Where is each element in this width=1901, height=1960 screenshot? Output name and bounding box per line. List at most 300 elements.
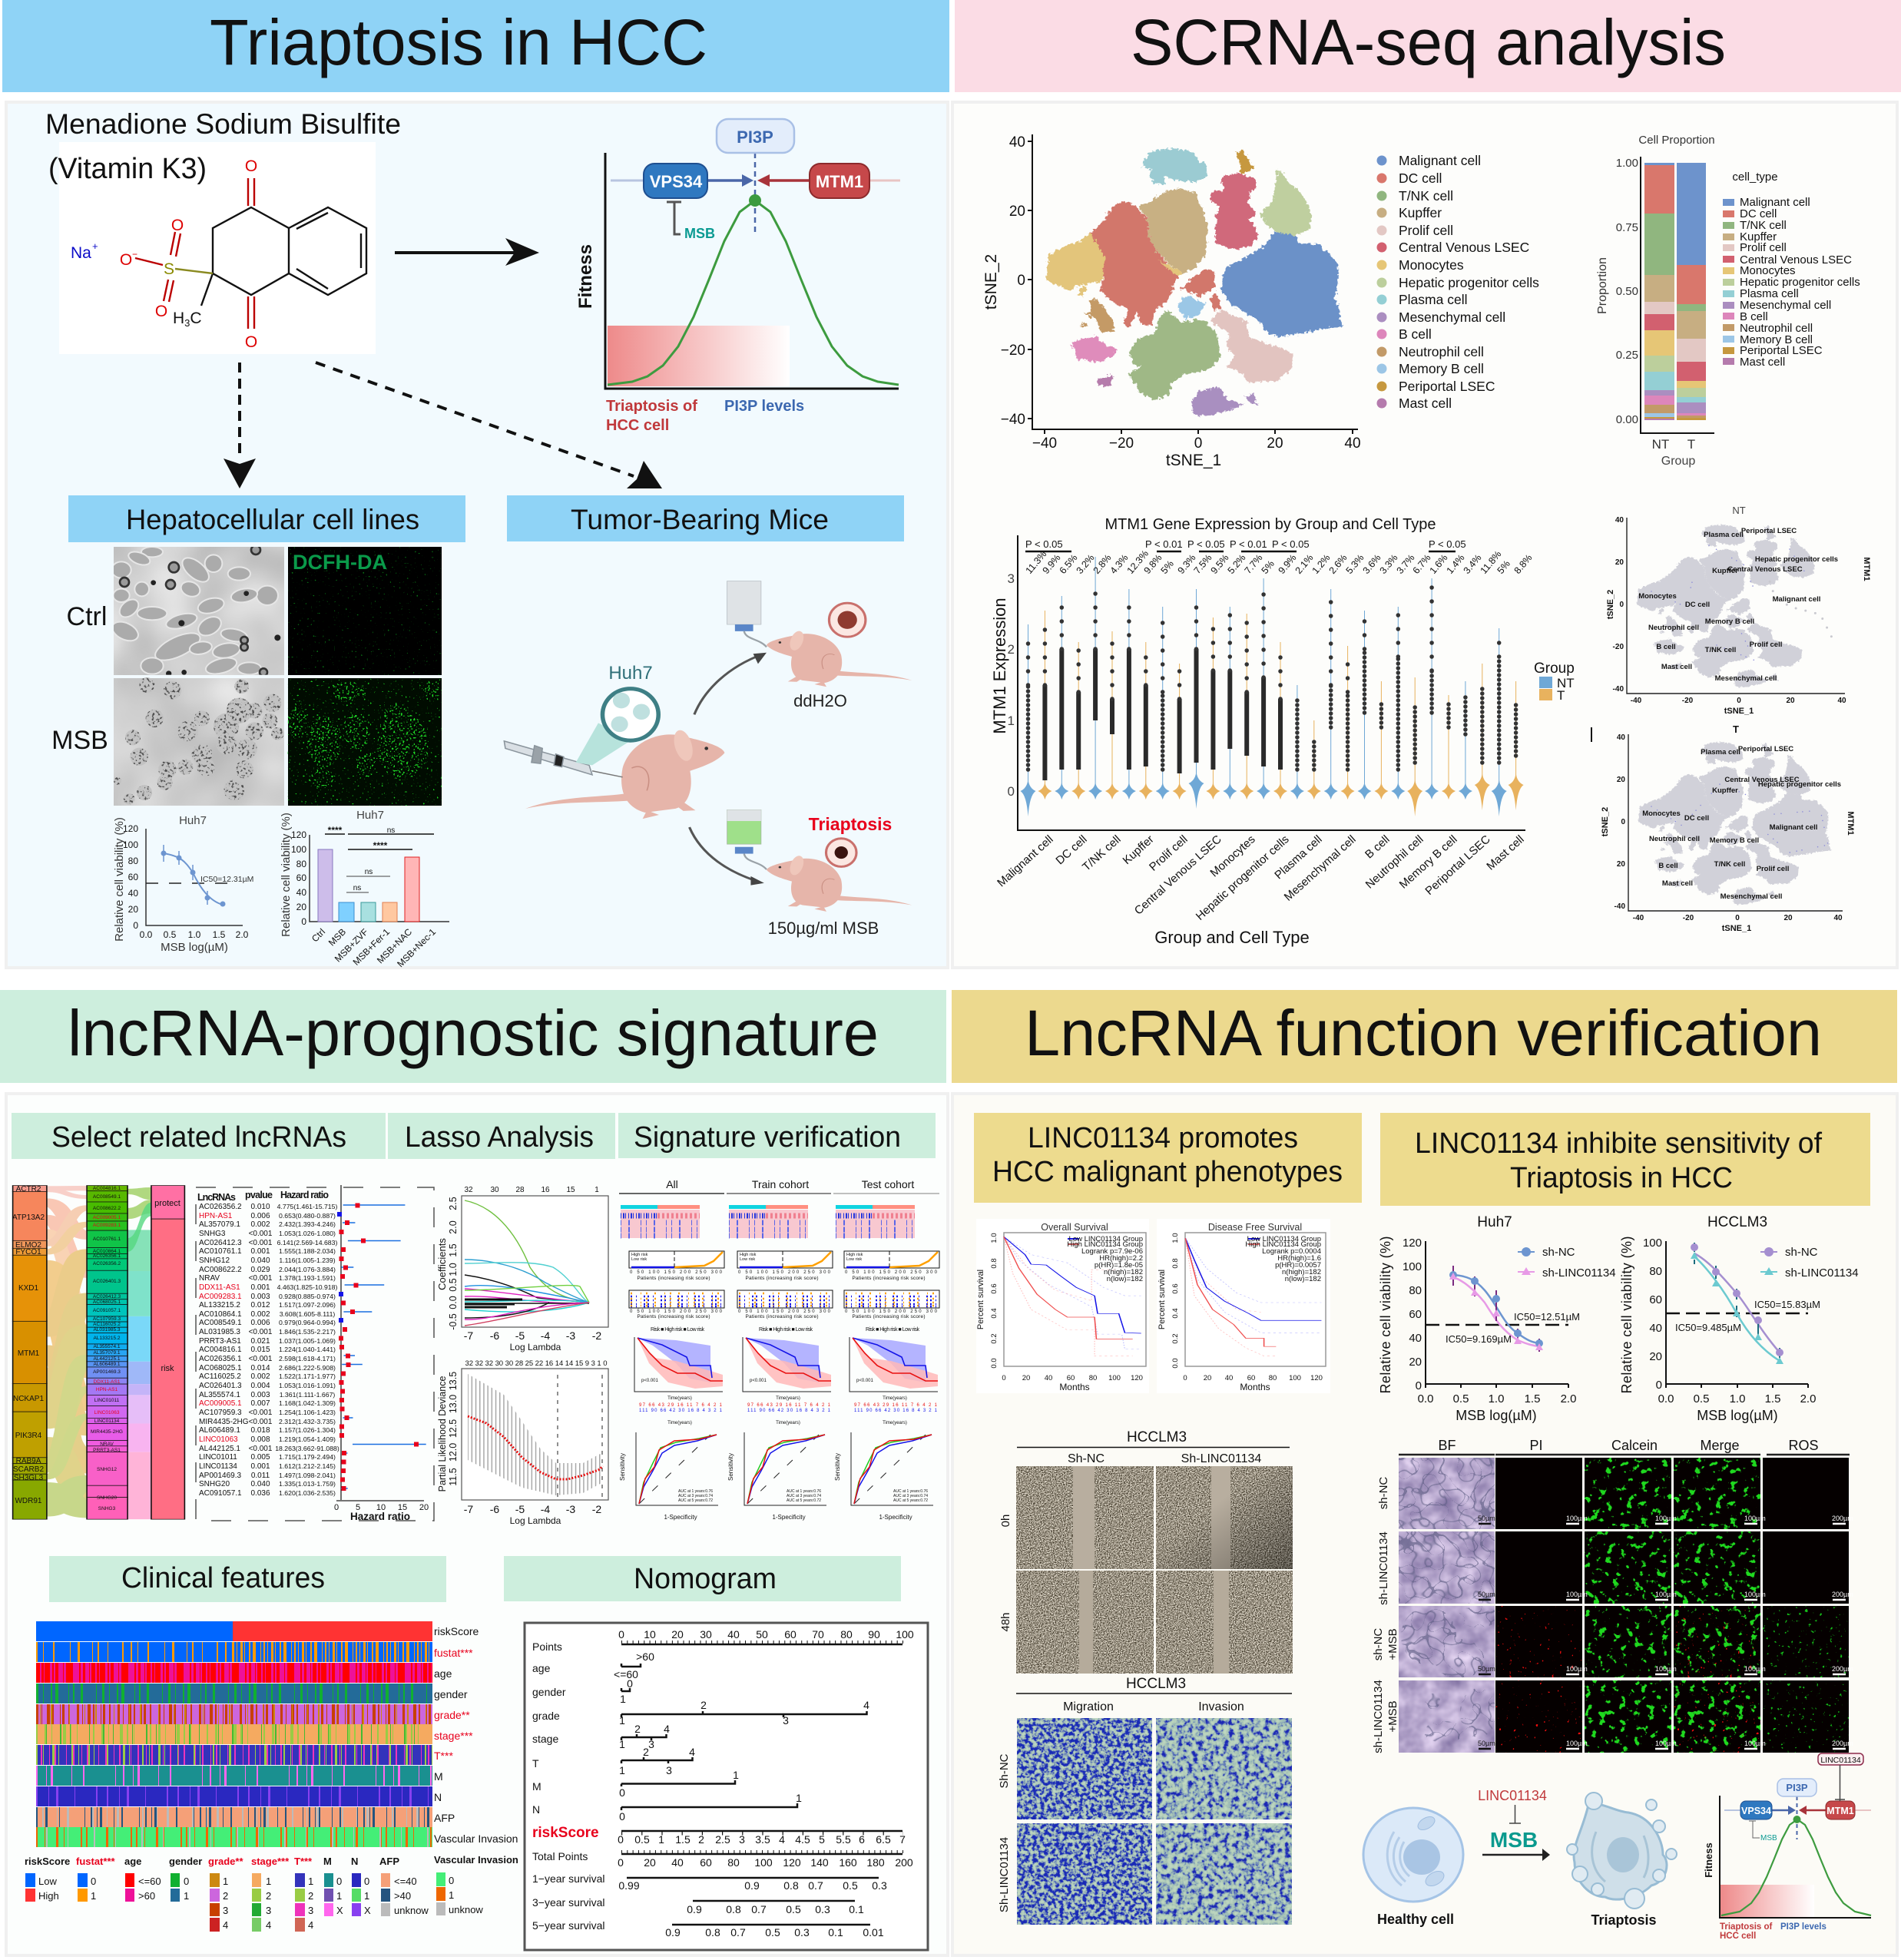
microscopy: wound healing: HCCLM3 [1127, 1429, 1187, 1445]
table rows: AL355574.1 [199, 1391, 240, 1399]
table rows: AP001469.3 [199, 1472, 241, 1480]
chart: disease free survival: 1.0 [1171, 1233, 1180, 1243]
chart: viability bars: MSB+Nec-1 [395, 926, 438, 969]
lncRNA labels: AC009005.1 [93, 1215, 121, 1220]
lncRNA labels: LINC01134 [94, 1419, 120, 1424]
chart: Huh7 dose response: 80 [1409, 1284, 1422, 1297]
lncRNA labels: AC091057.1 [93, 1308, 121, 1313]
chart: Huh7 dose response: Huh7 [1477, 1214, 1512, 1230]
axis captions: Triaptosis of [606, 398, 697, 415]
heading: LINC01134 promotes: HCC malignant phenotypes [992, 1156, 1343, 1188]
percentage labels: 7.7% [1243, 552, 1265, 576]
lncRNA labels: AC068025.1 [93, 1299, 121, 1305]
legend: clinical: 2 [266, 1890, 271, 1902]
legend: clinical: X [364, 1905, 371, 1916]
heading: Hepatocellular cell lines [68, 495, 465, 542]
chart: overall survival: Percent survival [976, 1270, 985, 1329]
chart: lasso coefficients: 16 [541, 1186, 550, 1194]
row labels: Vascular Invasion [434, 1833, 518, 1845]
chart: tSNE all cells: 0 [1017, 273, 1025, 289]
row labels: Points [532, 1641, 562, 1653]
chart: viability bars: Relative cell viability (%) [280, 813, 293, 937]
table rows: 2.312(1.432-3.735) [279, 1418, 336, 1425]
tick labels: 4 [664, 1723, 670, 1735]
tick labels: 1.5 [675, 1833, 691, 1846]
lncRNA labels: AL357079.1 [93, 1350, 121, 1356]
chart: lasso coefficients: -2 [592, 1329, 601, 1342]
percentage labels [1024, 548, 1535, 576]
chart: lasso coefficients: -5 [515, 1329, 525, 1342]
chart: tSNE all cells: 0 [1194, 435, 1202, 452]
chart: forest plot [196, 1185, 434, 1522]
microscopy: fluorescence grid: 100µm [1744, 1591, 1766, 1598]
lncRNA labels: AC116025.2 [93, 1322, 121, 1327]
tick labels: 0.9 [687, 1903, 702, 1915]
OS legend: Logrank p=7.9e-06 [1081, 1247, 1143, 1256]
microscopy: transwell: Sh-NC [998, 1753, 1011, 1789]
cell type axis labels: Kupffer [1121, 833, 1157, 867]
illustration: healthy cell [1363, 1808, 1463, 1927]
BF scale labels: 50µm [1478, 1591, 1495, 1598]
table rows: 0.005 [250, 1453, 270, 1462]
row labels: +MSB [1386, 1700, 1399, 1733]
chart: forest plot: LncRNAs [197, 1192, 236, 1203]
legend: Group: Group [1534, 661, 1575, 677]
row labels [532, 1641, 605, 1932]
legend: clinical: AFP [379, 1856, 399, 1867]
AFP row [36, 1807, 432, 1827]
table rows: LINC01134 [199, 1462, 237, 1471]
heatmap [621, 1205, 700, 1238]
lncRNA labels: AL133215.2 [93, 1336, 121, 1341]
chart: dose response Huh7: 100 [123, 839, 138, 850]
gene labels: PIK3R4 [15, 1432, 42, 1440]
chart: tSNE T expression [1591, 723, 1855, 933]
brightfield Ctrl cells [109, 545, 442, 806]
table rows: 0.015 [250, 1346, 270, 1354]
chart: tSNE all cells: tSNE_2 [982, 254, 1000, 310]
OS legend: High LINC01134 Group [1067, 1240, 1143, 1249]
percentage labels: 3.6% [1361, 552, 1383, 576]
table rows: 1.612(1.212-2.145) [279, 1462, 336, 1470]
chart: tSNE all cells [982, 134, 1361, 469]
survival scatter [629, 1290, 724, 1319]
microscopy: fluorescence grid: 100µm [1655, 1515, 1677, 1522]
risk score curve: High risk [631, 1253, 648, 1257]
chart: disease free survival: 60 [1247, 1374, 1255, 1382]
tick labels: 2 [643, 1746, 649, 1758]
microscopy: wound healing: 48h [999, 1612, 1012, 1632]
chart: cell proportion stacked bar: T [1687, 437, 1695, 452]
chart: disease free survival: 0.0 [1171, 1358, 1180, 1369]
percentage labels: 1.2% [1310, 552, 1333, 576]
significance brackets: P < 0.05 [1025, 538, 1063, 550]
age row [36, 1663, 432, 1683]
tick labels: 0.99 [618, 1879, 640, 1892]
calcein signal [1585, 1458, 1671, 1753]
chart: tSNE NT expression: 0 [1619, 601, 1624, 609]
chart: tSNE NT expression: MTM1 [1862, 557, 1871, 581]
OS legend: n(high)=182 [1104, 1268, 1143, 1276]
ROS signal [1763, 1458, 1849, 1753]
chart: tSNE all cells: −40 [1001, 412, 1025, 428]
charts: signature verification Test [834, 1205, 939, 1521]
chart: disease free survival: Months [1240, 1382, 1270, 1392]
tick labels: 0.5 [634, 1833, 650, 1846]
lncRNA labels: AC008622.2 [93, 1206, 121, 1211]
percentage labels: 9.5% [1209, 552, 1231, 576]
row labels: riskScore [434, 1625, 479, 1637]
Vascular row [36, 1827, 432, 1847]
row labels: M [532, 1780, 541, 1793]
percentage labels: 5% [1159, 558, 1176, 576]
row labels: 5−year survival [532, 1919, 605, 1932]
legend: clinical: 2 [308, 1890, 313, 1902]
illustration: triaptosis cell: Triaptosis [1591, 1912, 1657, 1928]
cell type axis labels: Plasma cell [1272, 833, 1325, 882]
chart: overall survival: 120 [1131, 1374, 1143, 1382]
table rows: DDX11-AS1 [199, 1283, 240, 1292]
legend: cell_type: Monocytes [1740, 264, 1796, 277]
table rows: AC004816.1 [199, 1346, 242, 1354]
table rows: 0.653(0.480-0.887) [279, 1212, 336, 1220]
icon: molecule structure: O [120, 251, 132, 269]
chart: tSNE all cells: 20 [1267, 435, 1283, 452]
chart: lasso coefficients: 2.5 [448, 1197, 459, 1210]
chart: lasso coefficients: 15 [566, 1186, 575, 1194]
legend: clinical: 1 [184, 1890, 189, 1902]
chart: MTM1 violin plot: 1 [1008, 713, 1015, 728]
chart: tSNE all cells: 40 [1344, 435, 1361, 452]
tick labels: 120 [783, 1856, 801, 1869]
table rows: AC008549.1 [199, 1319, 242, 1327]
tick labels: 0.1 [849, 1903, 864, 1915]
chart: overall survival: Overall Survival [1041, 1222, 1108, 1233]
cell type axis labels: Periportal LSEC [1422, 833, 1493, 898]
chart: HCCLM3 dose response: 1.5 [1765, 1392, 1780, 1405]
chart: viability bars: MSB+ZVF [333, 926, 370, 964]
heading: Hepatocellular cell lines: Hepatocellular cell lines [126, 504, 419, 535]
DFS legend: n(high)=182 [1282, 1268, 1321, 1276]
title: SCRNA-seq analysis [955, 0, 1901, 92]
tick labels: 1 [619, 1738, 625, 1750]
chart: forest plot: 10 [376, 1503, 386, 1512]
heading: drug name: Menadione Sodium Bisulfite [45, 108, 401, 140]
legend: tSNE cell types [1376, 153, 1539, 411]
significance brackets: P < 0.01 [1230, 538, 1267, 550]
row labels: gender [532, 1686, 566, 1698]
chart: viability bars: Ctrl [310, 926, 327, 944]
microscopy: Ctrl and MSB: Ctrl [67, 602, 107, 631]
chart: overall survival: 1.0 [990, 1233, 999, 1243]
legend: clinical: 1 [308, 1876, 313, 1887]
chart: lasso deviance: Log Lambda [510, 1515, 561, 1526]
chart: mini fitness curve: VPS34 [1741, 1806, 1771, 1816]
chart: viability bars: ns [365, 868, 373, 876]
icon: molecule structure: − [132, 249, 137, 260]
chart: tSNE NT expression: Kupffer [1712, 567, 1738, 575]
chart: tSNE T expression: 40 [1833, 914, 1843, 922]
heading: Lasso Analysis: Lasso Analysis [405, 1121, 594, 1154]
legend: clinical: 1 [364, 1890, 369, 1902]
microscopy: transwell: Invasion [1198, 1700, 1244, 1713]
legend: tSNE cell types: Mast cell [1399, 396, 1452, 411]
chart: tSNE T expression: B cell [1658, 862, 1678, 870]
tick labels: 70 [812, 1628, 824, 1641]
gene column [13, 1186, 47, 1519]
chart: viability bars: **** [328, 825, 343, 836]
gene labels: KXD1 [18, 1284, 38, 1293]
legend: clinical: 0 [364, 1876, 369, 1887]
legend: clinical: Vascular Invasion [434, 1854, 518, 1866]
heading: LINC01134 inhibite: Triaptosis in HCC [1510, 1162, 1733, 1194]
chart: lasso coefficients: 30 [490, 1186, 499, 1194]
chart: MTM1 violin plot: 2 [1008, 642, 1015, 657]
microscopy: Ctrl and MSB: DCFH-DA [293, 551, 387, 574]
gender row [36, 1684, 432, 1703]
table rows: AC026412.3 [199, 1239, 242, 1247]
syringe [504, 741, 623, 777]
microscopy: fluorescence grid: 100µm [1566, 1665, 1588, 1673]
gene labels: ACTR2 [16, 1185, 41, 1194]
cell type axis labels: T/NK cell [1080, 833, 1124, 874]
chart: lasso coefficients: 1 [594, 1186, 599, 1194]
table rows: 1.157(1.026-1.304) [279, 1426, 336, 1434]
tick labels: 0.8 [705, 1926, 720, 1938]
lncRNA labels: AC009283.1 [93, 1223, 121, 1228]
chart: HCCLM3 dose response: 60 [1649, 1293, 1662, 1306]
row labels: 1−year survival [532, 1872, 605, 1885]
survival scatter: Patients (increasing risk score) [638, 1314, 710, 1319]
injection beam [576, 723, 631, 765]
tick labels: 80 [840, 1628, 853, 1641]
percentage labels: 2.1% [1293, 552, 1316, 576]
chart: disease free survival: Percent survival [1157, 1270, 1167, 1329]
percentage labels: 2.6% [1327, 552, 1350, 576]
lncRNA labels: SNHG3 [98, 1506, 116, 1511]
table rows: 1.116(1.005-1.239) [279, 1256, 336, 1264]
heading: drug name [45, 108, 401, 185]
chart: tSNE T expression: 0 [1735, 914, 1740, 922]
table rows: 6.141(2.569-14.683) [277, 1239, 337, 1247]
icon: molecule structure: O [155, 303, 167, 320]
table rows: 0.007 [250, 1399, 270, 1408]
table rows: 1.224(1.040-1.441) [279, 1346, 336, 1353]
tick labels: 3 [739, 1833, 745, 1846]
legend: clinical: 0 [449, 1875, 454, 1886]
heading: Nomogram: Nomogram [634, 1563, 777, 1595]
microscopy: fluorescence grid: 200µm [1832, 1665, 1853, 1673]
tick labels: 90 [868, 1628, 880, 1641]
legend: tSNE cell types: T/NK cell [1399, 188, 1453, 204]
VPS34 pill [644, 164, 707, 198]
illustration: tumor-bearing mice [504, 581, 912, 938]
gene labels: FYCO1 [15, 1248, 41, 1256]
microscopy: wound healing: Sh-NC [1068, 1452, 1105, 1465]
row labels: AFP [434, 1812, 455, 1824]
table rows: 2.044(1.076-3.884) [279, 1266, 336, 1273]
scale bars [1566, 1524, 1846, 1749]
cell type axis labels: Memory B cell [1397, 833, 1460, 892]
chart: dose response Huh7: 1.5 [213, 929, 226, 940]
risk table: 97 66 43 29 16 11 7 6 4 2 1 [639, 1403, 723, 1408]
chart: tSNE NT expression: Central Venous LSEC [1727, 565, 1803, 574]
heading: Select related lncRNAs: Select related lncRNAs [51, 1121, 346, 1154]
microscopy: fluorescence grid: 100µm [1655, 1665, 1677, 1673]
tick labels: 100 [754, 1856, 773, 1869]
DFS legend: Low LINC01134 Group [1247, 1235, 1321, 1243]
lncRNA labels: AC010864.1 [93, 1249, 121, 1254]
percentage labels: 9.9% [1277, 552, 1299, 576]
lncRNA labels: AC026356.2 [93, 1261, 121, 1266]
chart: tSNE T expression: Hepatic progenitor cells [1758, 780, 1841, 789]
illustration: transition LINC01134 and MSB [1478, 1788, 1550, 1861]
table rows: 2.686(1.222-5.908) [279, 1364, 336, 1372]
tick labels: 2 [700, 1699, 707, 1711]
chart: forest plot: 15 [398, 1503, 407, 1512]
microscopy: wound healing: 0h [999, 1515, 1012, 1527]
legend HCCLM3: sh-LINC01134 [1785, 1266, 1859, 1280]
row labels: N [434, 1791, 442, 1803]
chart: disease free survival [1157, 1219, 1330, 1393]
chart: tSNE NT expression: Mast cell [1661, 663, 1692, 671]
charts: signature verification All [619, 1205, 724, 1521]
legend: clinical: 4 [223, 1919, 228, 1931]
chart: MTM1 violin plot [990, 516, 1575, 947]
legend: clinical: 3 [266, 1905, 271, 1916]
heading: Signature verification: Signature verification [634, 1121, 901, 1154]
gene labels: SCARB2 [13, 1465, 44, 1474]
table rows: SNHG3 [199, 1230, 226, 1238]
legend: clinical: 3 [223, 1905, 228, 1916]
tick labels: 40 [671, 1856, 684, 1869]
tick labels: 100 [896, 1628, 914, 1641]
chart: tSNE all cells: −40 [1032, 435, 1057, 452]
riskScore [36, 1621, 432, 1641]
table rows: 1.053(1.016-1.091) [279, 1382, 336, 1389]
chart: HCCLM3 dose response: IC50=15.83µM [1754, 1299, 1820, 1310]
legend: Group: NT [1557, 676, 1575, 690]
legend: cell_type: B cell [1740, 310, 1768, 323]
lncRNA labels: AC010761.1 [93, 1237, 121, 1242]
lncRNA labels: LINC01063 [94, 1410, 120, 1415]
microscopy: fluorescence grid: 100µm [1655, 1591, 1677, 1598]
gene labels: NCKAP1 [13, 1395, 44, 1403]
legend: tSNE cell types: Central Venous LSEC [1399, 240, 1529, 255]
table rows: 0.006 [250, 1212, 270, 1220]
microscopy: transwell [998, 1676, 1292, 1925]
chart: tSNE T expression: Memory B cell [1710, 836, 1759, 845]
chart: MTM1 violin plot: MTM1 Gene Expression by Group and Cell Type [1105, 516, 1436, 533]
illustration: triaptosis cell [1567, 1793, 1677, 1928]
icon: molecule structure: C [190, 310, 202, 327]
percentage labels: 3.7% [1395, 552, 1417, 576]
tick labels: 0.3 [815, 1903, 830, 1915]
table rows: AL031985.3 [199, 1328, 240, 1336]
icon: molecule structure: H [173, 310, 184, 327]
tick labels: 0.3 [794, 1926, 810, 1938]
chart: dose response Huh7: 2.0 [236, 929, 249, 940]
chart: tSNE T expression: -40 [1615, 902, 1625, 911]
tick labels: 3 [648, 1738, 654, 1750]
chart: overall survival: 0.0 [990, 1358, 999, 1369]
row labels: sh-NC [1377, 1477, 1390, 1509]
heading: Select related lncRNAs [12, 1113, 386, 1159]
table rows: <0.001 [249, 1274, 273, 1283]
chart: lasso deviance: 13.0 [448, 1395, 459, 1413]
lncRNA labels: AC026401.3 [93, 1279, 121, 1284]
chart: HCCLM3 dose response: 2.0 [1800, 1392, 1816, 1405]
lncRNA labels: AL031985.3 [93, 1327, 121, 1333]
chart: HCCLM3 dose response: 1.0 [1730, 1392, 1745, 1405]
chart: tSNE NT expression: DC cell [1685, 601, 1710, 609]
chart: viability bars: MSB [326, 926, 348, 949]
table rows: 1.846(1.535-2.217) [279, 1328, 336, 1336]
chart: viability bars: 0 [301, 916, 306, 927]
legend: cell_type: Plasma cell [1740, 287, 1799, 300]
gene labels: SH3GL3 [14, 1474, 44, 1482]
chart: forest plot: Hazard ratio [280, 1190, 329, 1200]
chart: overall survival: 60 [1067, 1374, 1075, 1382]
lncRNA labels: MIR4435-2HG [91, 1429, 123, 1435]
chart: disease free survival: 0 [1183, 1374, 1187, 1382]
lncRNA column [87, 1186, 128, 1519]
row labels: gender [434, 1688, 468, 1700]
tick labels: 40 [727, 1628, 740, 1641]
lncRNA labels: AC026412.3 [93, 1294, 121, 1299]
tick labels: 2 [698, 1833, 704, 1846]
lncRNA labels: SNHG20 [97, 1495, 117, 1501]
Kaplan-Meier: Time(years) [667, 1396, 692, 1401]
table rows: AC010761.1 [199, 1247, 242, 1256]
microscopy: fluorescence grid: 100µm [1744, 1740, 1766, 1747]
table rows: 1.555(1.188-2.034) [279, 1247, 336, 1255]
row labels: stage [532, 1733, 558, 1745]
chart: viability bars: 120 [291, 829, 306, 840]
chart: viability bars: ns [387, 826, 395, 835]
percentage labels: 12.3% [1125, 548, 1151, 576]
BF scale labels: 50µm [1478, 1515, 1495, 1522]
chart: forest plot: Hazard ratio [350, 1511, 410, 1522]
axis captions: HCC cell [606, 417, 669, 434]
legend: clinical: 0 [336, 1876, 342, 1887]
legend: cell_type: Kupffer [1740, 230, 1777, 243]
chart: lasso deviance: -3 [566, 1503, 575, 1515]
chart: viability bars: **** [373, 840, 388, 851]
DFS legend: High LINC01134 Group [1245, 1240, 1321, 1249]
cell type axis labels: B cell [1363, 833, 1393, 862]
chart: HCCLM3 dose response: MSB log(µM) [1697, 1408, 1778, 1423]
chart: Huh7 dose response: 60 [1409, 1308, 1422, 1321]
chart: tSNE T expression: Periportal LSEC [1738, 745, 1793, 753]
chart: viability bars: 20 [296, 902, 306, 912]
charts: signature verification All: Risk ■ High risk ■ Low risk [651, 1327, 705, 1333]
table rows: AC009283.1 [199, 1293, 242, 1301]
gene labels: WDR91 [15, 1497, 42, 1505]
title: lncRNA-prognostic signature [0, 990, 946, 1083]
tick labels: 30 [700, 1628, 712, 1641]
percentage labels: 7.5% [1192, 552, 1214, 576]
arrow: molecule to fitness [395, 238, 539, 266]
tick labels: 0 [619, 1810, 625, 1823]
chart: viability bars: 60 [296, 872, 306, 883]
table rows: AC026356.1 [199, 1355, 242, 1363]
legend: cell_type: Hepatic progenitor cells [1740, 276, 1860, 289]
chart: cell proportion stacked bar: 0.75 [1616, 221, 1638, 234]
legend: clinical: 2 [223, 1890, 228, 1902]
chart: nomogram [525, 1623, 928, 1950]
tick labels: 1 [658, 1833, 664, 1846]
